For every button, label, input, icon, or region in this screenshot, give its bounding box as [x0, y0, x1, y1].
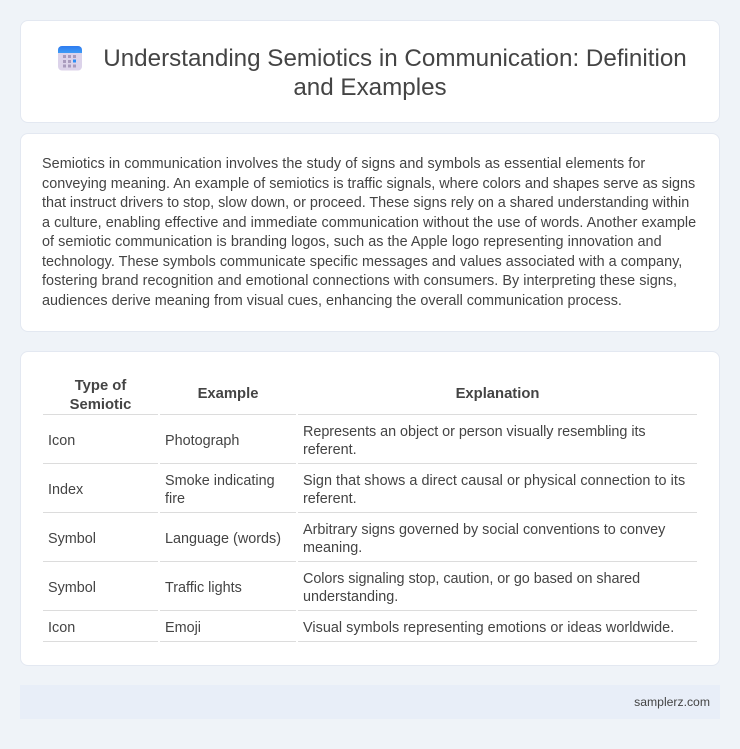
text block: description: Semiotics in communication involves the study of signs and symbols as essential elements for: [42, 156, 645, 172]
panel: description card: [20, 133, 720, 332]
text block: description: of semiotic communication is branding logos, such as the Apple logo representing innovation and: [42, 234, 662, 250]
row: symbol traffic lights: Traffic lights: [165, 580, 242, 596]
column heading: type of semiotic: Type of: [75, 378, 126, 394]
column heading: type of semiotic: [70, 378, 131, 413]
row: symbol language: meaning.: [303, 540, 362, 556]
title: and Examples: [293, 74, 447, 101]
row: symbol language: [48, 522, 666, 556]
title: Understanding Semiotics in Communication: Definition: [103, 45, 687, 72]
row: index smoke: Index: [48, 482, 83, 498]
row: icon photograph: [48, 424, 646, 458]
text block: description: conveying meaning. An example of semiotics is traffic signals, where colors and shapes serve as signs: [42, 176, 695, 192]
text block: description: audiences derive meaning from visual cues, enhancing the overall communication process.: [42, 292, 622, 308]
row: index smoke: Smoke indicating: [165, 473, 275, 489]
row: icon emoji: [48, 620, 674, 636]
row: symbol traffic lights: understanding.: [303, 589, 398, 605]
panel: title card: [20, 20, 720, 123]
row: index smoke: Sign that shows a direct causal or physical connection to its: [303, 473, 685, 489]
row: index smoke: referent.: [303, 491, 357, 507]
row: symbol language: Language (words): [165, 531, 281, 547]
row: icon photograph: Photograph: [165, 433, 239, 449]
row: symbol traffic lights: [48, 571, 640, 605]
row: symbol traffic lights: Colors signaling stop, caution, or go based on shared: [303, 571, 640, 587]
table: [43, 378, 697, 642]
row: symbol language: Arbitrary signs governed by social conventions to convey: [303, 522, 665, 538]
title: [103, 45, 687, 101]
row: index smoke: [48, 473, 685, 507]
row: symbol language: Symbol: [48, 531, 96, 547]
text block: description: [42, 156, 696, 308]
column heading: example: Example: [198, 386, 258, 402]
row: icon emoji: Emoji: [165, 620, 201, 636]
row: index smoke: fire: [165, 491, 185, 507]
column heading: explanation: Explanation: [456, 386, 539, 402]
row: icon photograph: Icon: [48, 433, 75, 449]
row: icon photograph: referent.: [303, 442, 357, 458]
panel: table card: [20, 351, 720, 666]
row: symbol traffic lights: Symbol: [48, 580, 96, 596]
row: icon photograph: Represents an object or person visually resembling its: [303, 424, 646, 440]
text block: description: fostering brand recognition and emotional connections with consumers. By interpreting these signs,: [42, 273, 677, 289]
text block: description: technology. These symbols communicate specific messages and values associated with a company,: [42, 254, 682, 270]
column heading: type of semiotic: Semiotic: [70, 397, 131, 413]
row: icon emoji: Visual symbols representing emotions or ideas worldwide.: [303, 620, 674, 636]
row: icon emoji: Icon: [48, 620, 75, 636]
icon: calendar: [58, 46, 82, 70]
footer text: samplerz.com: [634, 695, 710, 709]
text block: description: that instruct drivers to stop, slow down, or proceed. These signs rely on a shared understanding within: [42, 195, 689, 211]
footer bar: [20, 685, 720, 719]
text block: description: a culture, enabling effective and immediate communication without the use of words. Another example: [42, 214, 696, 230]
